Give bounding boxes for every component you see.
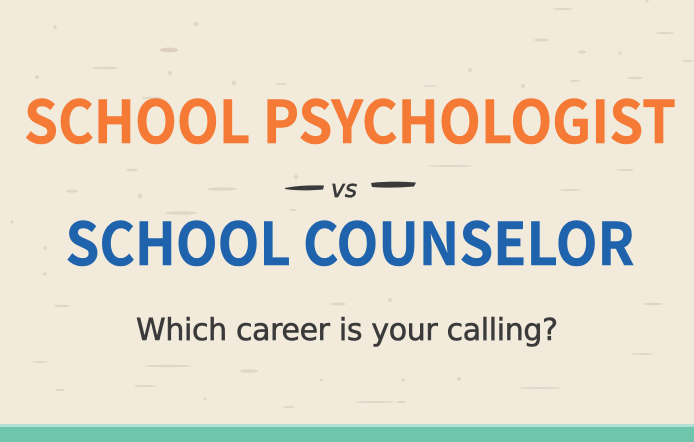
- left brush stroke: [285, 185, 324, 190]
- vs label: vs: [331, 175, 357, 203]
- right brush stroke: [371, 182, 416, 188]
- versus divider: [285, 175, 416, 203]
- title: school counselor: SCHOOL COUNSELOR: [66, 197, 634, 282]
- subtitle: Which career is your calling?: [136, 313, 558, 348]
- teal footer band: [0, 424, 694, 442]
